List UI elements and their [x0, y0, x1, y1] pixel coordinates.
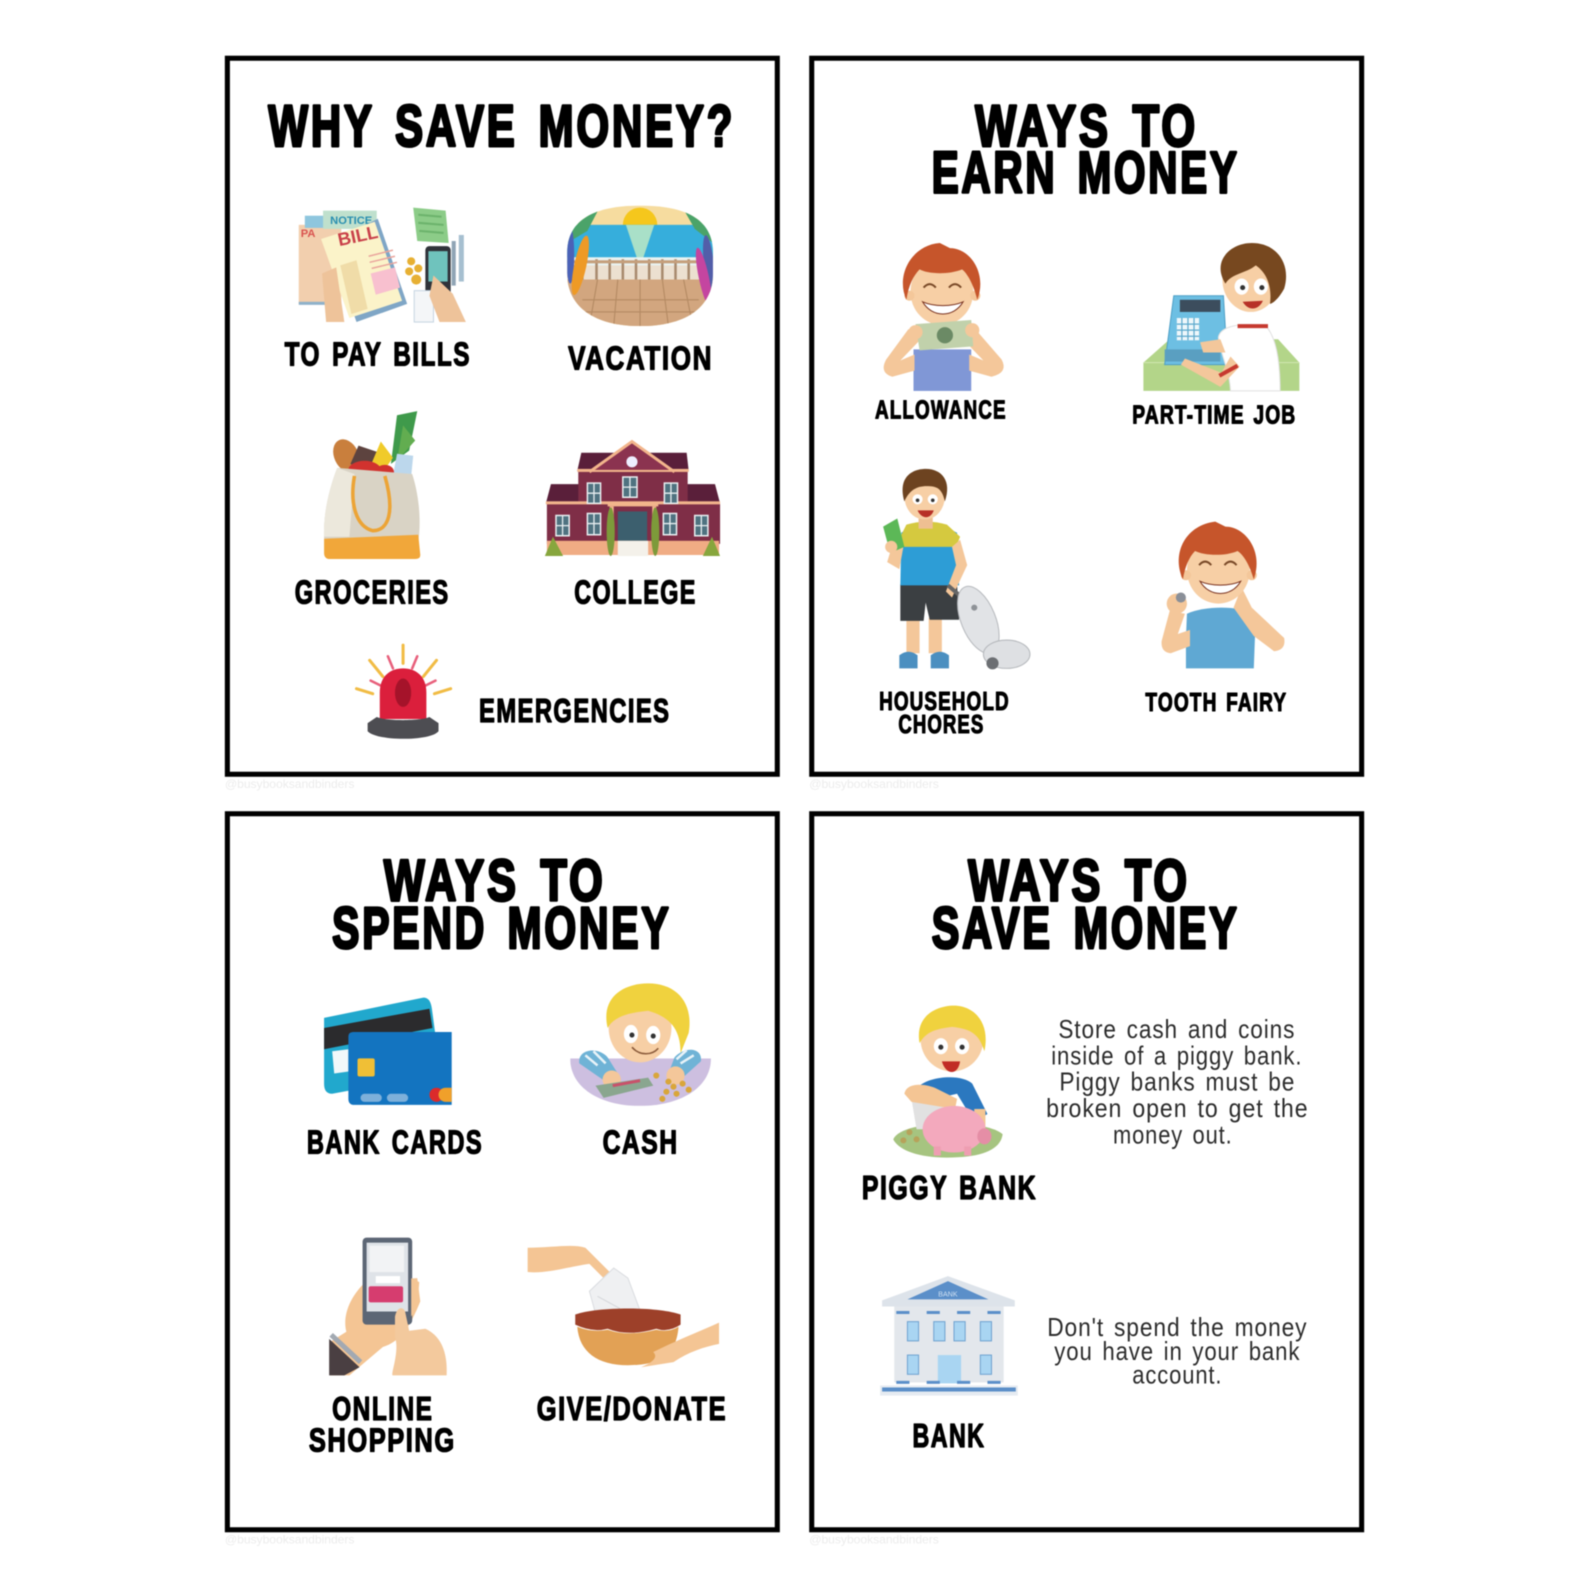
label: household chores: CHORES	[898, 709, 984, 739]
text: bank description: you have in your bank	[1054, 1338, 1300, 1366]
label: online shopping: ONLINE	[332, 1391, 433, 1428]
watermark: @busybooksandbinders	[809, 1532, 939, 1546]
title: ways to earn money	[932, 94, 1240, 205]
title: why save money: WHY SAVE MONEY?	[268, 94, 735, 159]
icon: bank building	[880, 1276, 1018, 1396]
watermark: @busybooksandbinders	[809, 777, 939, 791]
label: groceries: GROCERIES	[295, 575, 450, 612]
text: bank description	[1047, 1314, 1307, 1389]
icon: boy with piggy bank	[893, 1006, 1003, 1158]
label: household chores	[879, 686, 1010, 739]
icon: emergency siren	[356, 645, 451, 739]
text: piggy bank description: Store cash and coins	[1058, 1016, 1295, 1044]
label: online shopping: SHOPPING	[309, 1422, 456, 1459]
title: ways to earn money: WAYS TO	[975, 94, 1198, 159]
icon: college	[545, 442, 720, 556]
text: bank description: account.	[1132, 1361, 1222, 1389]
label: to pay bills: TO PAY BILLS	[285, 337, 471, 374]
label: online shopping	[309, 1391, 456, 1459]
icon: donate to basket	[528, 1246, 719, 1367]
text: piggy bank description: inside of a piggy bank.	[1051, 1042, 1302, 1070]
label: tooth fairy: TOOTH FAIRY	[1145, 687, 1287, 717]
icon: bills: NOTICE	[330, 215, 372, 227]
icon: boy with tooth	[1162, 522, 1284, 668]
icon: bank building: BANK	[938, 1290, 958, 1298]
text: piggy bank description	[1046, 1016, 1308, 1149]
icon: online shopping phone	[329, 1238, 447, 1375]
label: college: COLLEGE	[574, 575, 697, 612]
title: ways to save money: WAYS TO	[968, 848, 1190, 913]
icon: vacation	[562, 203, 719, 329]
label: part-time job: PART-TIME JOB	[1132, 399, 1296, 429]
icon: bills	[299, 208, 466, 322]
label: bank cards: BANK CARDS	[307, 1125, 483, 1162]
title: ways to spend money: WAYS TO	[384, 848, 606, 913]
label: cash: CASH	[603, 1125, 679, 1162]
icon: boy with allowance	[884, 243, 1004, 391]
label: allowance: ALLOWANCE	[875, 394, 1007, 424]
title: ways to spend money: SPEND MONEY	[332, 896, 671, 961]
panel: ways to spend money	[225, 814, 777, 1546]
watermark: @busybooksandbinders	[225, 1532, 354, 1546]
icon: bills: PA	[301, 228, 315, 240]
label: household chores: HOUSEHOLD	[879, 686, 1010, 716]
text: piggy bank description: Piggy banks must be	[1059, 1069, 1295, 1097]
watermark: @busybooksandbinders	[225, 777, 354, 791]
panel: ways to save money	[809, 814, 1362, 1546]
panel: ways to earn money	[809, 58, 1362, 791]
title: ways to save money	[932, 848, 1240, 961]
text: piggy bank description: money out.	[1113, 1121, 1233, 1149]
title: ways to save money: SAVE MONEY	[932, 896, 1240, 961]
label: emergencies: EMERGENCIES	[479, 693, 670, 730]
icon: boy doing chores	[883, 469, 1030, 669]
label: bank: BANK	[912, 1418, 985, 1455]
icon: bank cards	[324, 998, 452, 1105]
icon: bills: BILL	[336, 222, 380, 250]
panel: why save money	[225, 58, 777, 791]
label: vacation: VACATION	[568, 341, 713, 378]
text: piggy bank description: broken open to get the	[1046, 1095, 1308, 1123]
title: ways to spend money	[332, 848, 671, 961]
icon: boy at cash register	[1143, 243, 1299, 391]
icon: child with cash	[567, 983, 714, 1109]
label: give/donate: GIVE/DONATE	[537, 1391, 727, 1428]
label: piggy bank: PIGGY BANK	[862, 1170, 1037, 1207]
title: ways to earn money: EARN MONEY	[932, 140, 1240, 205]
text: bank description: Don't spend the money	[1047, 1314, 1307, 1342]
icon: groceries	[324, 411, 420, 559]
